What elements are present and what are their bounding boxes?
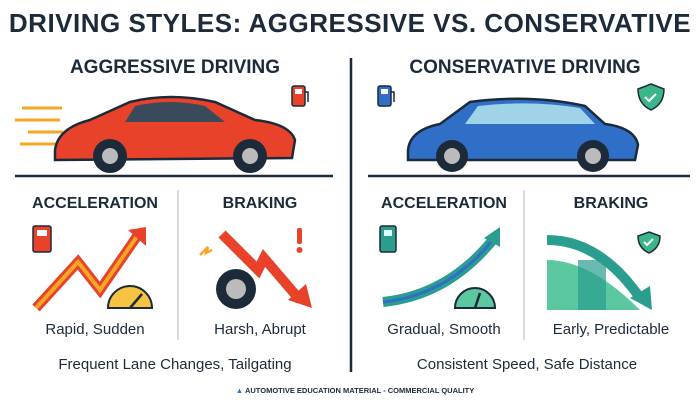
label: acceleration (aggressive): ACCELERATION [32, 195, 158, 212]
chart: conservative braking [547, 232, 660, 310]
label: acceleration (conservative): ACCELERATION [381, 195, 507, 212]
footer: ▲ AUTOMOTIVE EDUCATION MATERIAL - COMMERCIAL QUALITY [236, 386, 474, 395]
summary: conservative: Consistent Speed, Safe Distance [417, 356, 637, 373]
icon: fuel pump blue [378, 86, 394, 106]
icon: red sports car [15, 97, 295, 173]
summary: aggressive: Frequent Lane Changes, Tailgating [58, 356, 292, 373]
label: braking (aggressive): BRAKING [223, 195, 297, 212]
heading: aggressive driving: AGGRESSIVE DRIVING [70, 57, 280, 78]
chart: aggressive acceleration zigzag [33, 226, 152, 308]
caption: gradual smooth: Gradual, Smooth [387, 321, 501, 338]
icon: green shield [638, 84, 664, 110]
icon: fuel pump red [292, 86, 308, 106]
chart: aggressive braking [200, 228, 312, 309]
heading: conservative driving: CONSERVATIVE DRIVING [409, 57, 641, 78]
chart: conservative acceleration curve [380, 226, 500, 308]
caption: rapid sudden: Rapid, Sudden [45, 321, 145, 338]
icon: blue sedan [408, 99, 638, 172]
caption: harsh abrupt: Harsh, Abrupt [214, 321, 306, 338]
title: DRIVING STYLES: AGGRESSIVE VS. CONSERVATIVE [9, 8, 691, 38]
label: braking (conservative): BRAKING [574, 195, 648, 212]
caption: early predictable: Early, Predictable [553, 321, 669, 338]
